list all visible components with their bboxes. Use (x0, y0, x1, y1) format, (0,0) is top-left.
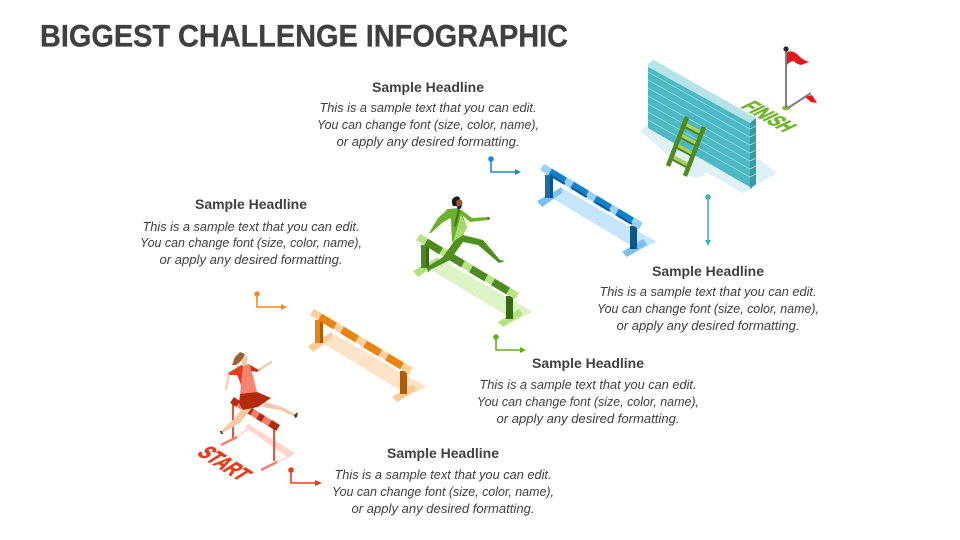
title: BIGGEST CHALLENGE INFOGRAPHIC (40, 18, 568, 54)
red hurdle shadow (237, 424, 295, 462)
orange hurdle (308, 312, 427, 402)
text block: left headline: You can change font (size, color, name), (140, 235, 362, 250)
legs (427, 235, 505, 273)
finish text on floor: FINISH (735, 98, 802, 135)
woman figure (220, 352, 298, 434)
text block: middle headline: or apply any desired formatting. (496, 411, 680, 426)
wall top cap (648, 60, 756, 123)
text block: left headline: This is a sample text that you can edit. (142, 219, 360, 234)
ladder (668, 117, 704, 176)
woman jumping hurdle (220, 352, 298, 470)
back arm (429, 209, 452, 233)
head (454, 199, 462, 207)
torso (447, 208, 467, 242)
front arm (460, 209, 488, 222)
wall with ladder (642, 60, 775, 192)
text block: bottom headline: Sample Headline (387, 445, 499, 461)
text block: right headline (597, 263, 819, 333)
text block: left headline: or apply any desired formatting. (160, 252, 342, 267)
text block: top headline (317, 79, 539, 149)
wall front face (648, 64, 750, 187)
arrow: teal connector (705, 194, 711, 246)
arrow: red connector (288, 467, 322, 486)
text block: top headline: You can change font (size, color, name), (317, 117, 539, 132)
red hurdle (221, 400, 278, 470)
text block: left headline: Sample Headline (195, 196, 307, 212)
text block: right headline: Sample Headline (652, 263, 764, 279)
arrow: orange connector (254, 291, 287, 310)
start text on floor: START (191, 443, 257, 485)
text block: middle headline: You can change font (size, color, name), (477, 394, 699, 409)
woman head and hair (240, 355, 248, 363)
finish flags (782, 46, 817, 110)
text block: right headline: or apply any desired formatting. (616, 318, 800, 333)
text block: middle headline (477, 355, 699, 426)
woman torso (228, 364, 247, 394)
woman arms (226, 374, 229, 389)
green hurdle (413, 237, 533, 327)
text block: bottom headline: or apply any desired formatting. (352, 501, 534, 516)
text block: top headline: This is a sample text that you can edit. (320, 100, 536, 115)
text block: bottom headline (332, 445, 554, 516)
man jumping hurdle (427, 196, 505, 273)
text block: top headline: Sample Headline (372, 79, 484, 95)
text block: top headline: or apply any desired formatting. (336, 134, 520, 149)
woman legs (262, 402, 297, 417)
text block: middle headline: This is a sample text that you can edit. (480, 377, 696, 392)
arrow: blue connector (488, 156, 521, 175)
arrow: green connector (493, 334, 526, 353)
text block: right headline: You can change font (size, color, name), (597, 301, 819, 316)
wall side face (750, 118, 756, 189)
wall brick lines (648, 72, 756, 177)
blue hurdle (537, 167, 657, 257)
text block: left headline (140, 196, 362, 267)
text block: bottom headline: This is a sample text that you can edit. (334, 467, 552, 482)
woman skirt (239, 392, 271, 410)
wall shadow (642, 127, 775, 192)
text block: middle headline: Sample Headline (532, 355, 644, 371)
text block: bottom headline: You can change font (size, color, name), (332, 484, 554, 499)
text block: right headline: This is a sample text that you can edit. (600, 284, 816, 299)
